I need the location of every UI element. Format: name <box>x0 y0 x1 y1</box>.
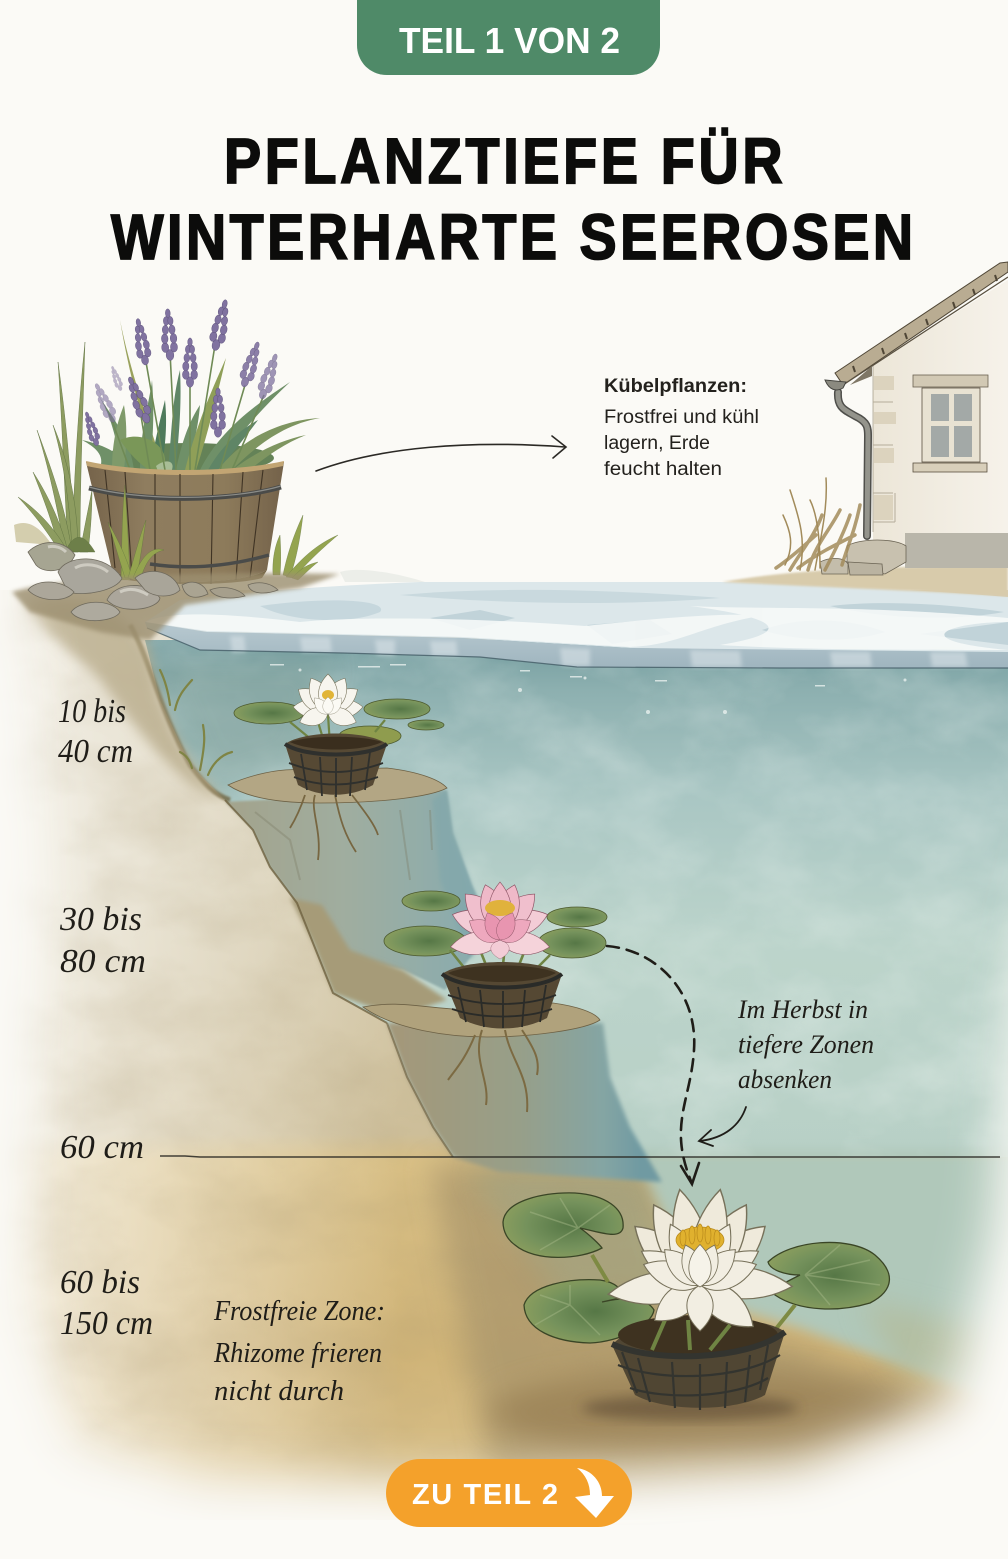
dry grass <box>776 478 860 570</box>
water plants on bank <box>160 670 232 775</box>
planter with lavender <box>14 298 338 584</box>
basket <box>442 962 562 1028</box>
icon: down arrow <box>575 1468 614 1518</box>
roots <box>448 1030 538 1112</box>
basket <box>285 734 387 797</box>
button: to part 2 <box>386 1459 632 1527</box>
lily pads <box>503 1193 889 1343</box>
leaves <box>384 891 607 958</box>
depth label: 60 to 150 cm: 60 bis <box>60 1264 140 1301</box>
dashed arrow: lowering the basket <box>607 946 699 1184</box>
title: WINTERHARTE SEEROSEN <box>111 201 913 273</box>
note: frost-free zone: nicht durch <box>214 1376 344 1407</box>
basket <box>612 1315 785 1410</box>
depth label: 30 to 80 cm: 30 bis <box>59 901 142 938</box>
ice sheet <box>145 570 1008 668</box>
wooden tub <box>86 461 284 584</box>
title: PFLANZTIEFE FÜR <box>224 125 783 197</box>
note: autumn lowering: Im Herbst in <box>737 995 868 1024</box>
arrow: from autumn note <box>699 1107 746 1146</box>
flower <box>624 1186 776 1298</box>
note: frost-free zone: Frostfreie Zone: <box>213 1296 385 1327</box>
earth bank <box>0 590 1008 1520</box>
house plinth <box>905 533 1008 568</box>
white flower <box>292 674 364 730</box>
house wall <box>873 280 1008 566</box>
window <box>913 375 988 472</box>
note: autumn lowering: tiefere Zonen <box>738 1030 874 1059</box>
pond water <box>140 640 1008 1420</box>
lavender foliage <box>82 320 320 482</box>
depth label: 30 to 80 cm: 80 cm <box>60 943 146 980</box>
note: container plants: lagern, Erde <box>604 433 710 454</box>
shelf <box>228 768 447 803</box>
rocks <box>12 543 340 640</box>
middle lily on shelf <box>363 881 607 1112</box>
small lily on shelf <box>228 674 447 860</box>
shelf <box>363 1003 600 1037</box>
title <box>111 125 913 273</box>
ice front face <box>145 622 1008 668</box>
pond cross-section <box>0 590 1008 1520</box>
front grasses <box>108 485 338 580</box>
pad stems <box>592 1255 795 1330</box>
arrow: to planter note <box>316 436 566 471</box>
note: container plants: Kübelpflanzen: <box>604 376 747 397</box>
lavender spikes <box>81 298 283 447</box>
downpipe <box>825 380 868 536</box>
depth label: 10 to 40 cm: 40 cm <box>58 733 133 770</box>
shoreline ground right <box>722 566 1008 596</box>
bank edge line <box>130 625 230 800</box>
submerged cliff: upper <box>225 790 492 1023</box>
depth label: 60 to 150 cm: 150 cm <box>60 1305 153 1342</box>
depth label: 10 to 40 cm: 10 bis <box>58 693 126 730</box>
water sparkles under ice <box>270 664 906 714</box>
top badge <box>357 0 660 75</box>
button: to part 2: ZU TEIL 2 <box>412 1479 558 1511</box>
house <box>776 262 1008 575</box>
depth line <box>160 1156 1000 1157</box>
house roof <box>835 262 1008 385</box>
pond floor sediment <box>490 1370 910 1454</box>
ice surface <box>145 582 1008 652</box>
note: autumn lowering: absenken <box>738 1065 832 1094</box>
pink flower <box>449 881 551 941</box>
roots <box>290 795 378 860</box>
depth label: 60 cm: 60 cm <box>60 1129 144 1166</box>
leaves <box>234 699 444 746</box>
note: frost-free zone: Rhizome frieren <box>213 1338 382 1369</box>
big white lily <box>503 1186 889 1410</box>
top badge: TEIL 1 VON 2 <box>399 20 620 61</box>
note: container plants: Frostfrei und kühl <box>604 407 759 428</box>
stone steps <box>820 540 906 575</box>
submerged cliff: lower <box>387 1023 662 1182</box>
back grasses <box>14 342 95 552</box>
note: container plants: feucht halten <box>604 459 722 480</box>
